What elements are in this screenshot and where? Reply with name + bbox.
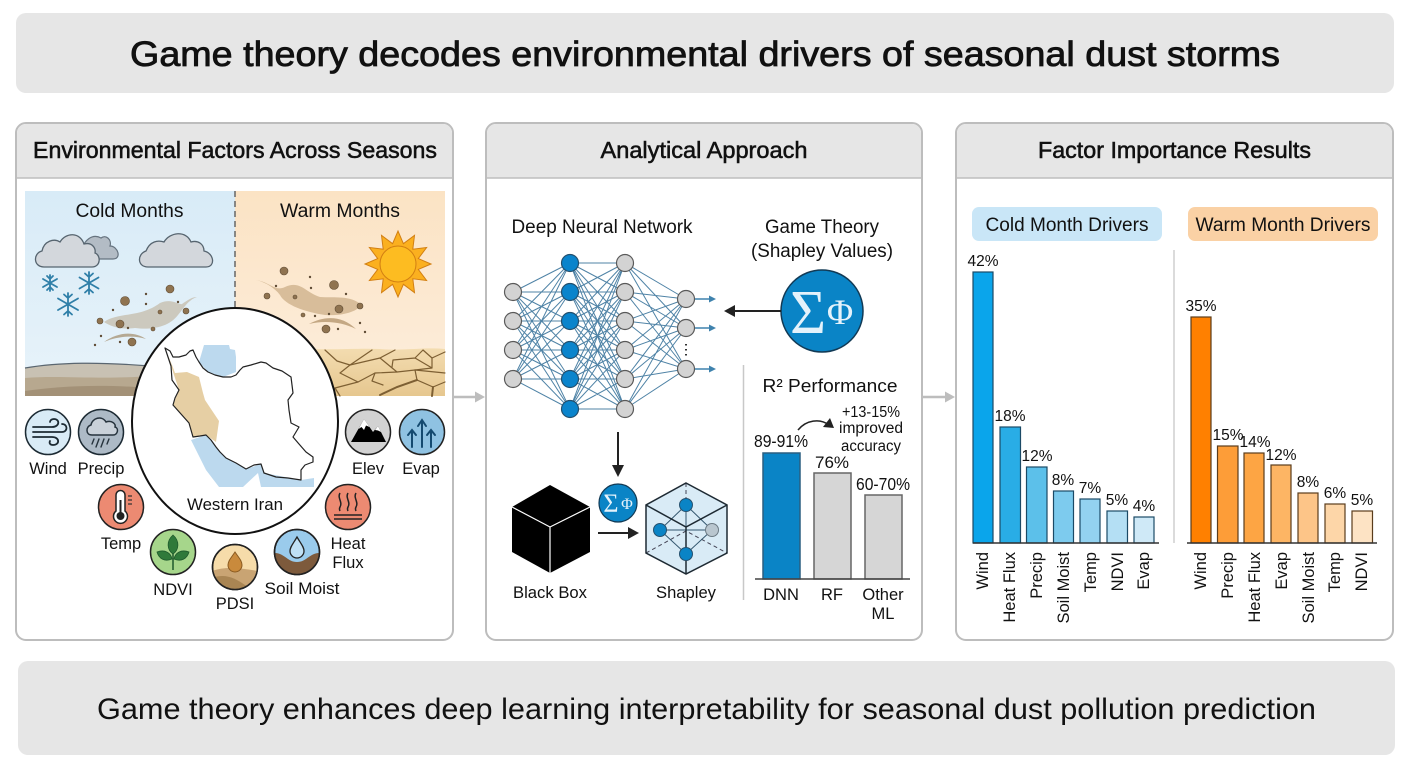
footer banner bbox=[18, 661, 1395, 755]
bar chart: warm month drivers: NDVI bbox=[1353, 552, 1371, 591]
heading: game theory: (Shapley Values) bbox=[751, 241, 893, 262]
arrow: factors to approach bbox=[453, 392, 485, 402]
bar chart: cold month drivers: 5% bbox=[1106, 492, 1128, 509]
icon: small sigma phi badge: Σ bbox=[603, 489, 619, 518]
bar chart: cold month drivers: Heat Flux bbox=[1001, 551, 1019, 623]
panel header: factor importance bbox=[957, 124, 1392, 178]
bar chart: warm month drivers: 5% bbox=[1351, 492, 1373, 509]
divider bbox=[1173, 250, 1175, 543]
bar chart: warm month drivers: 6% bbox=[1324, 485, 1346, 502]
warm months scene: Warm Months bbox=[280, 201, 400, 222]
icon: precipitation bbox=[78, 410, 124, 454]
bar chart: R2 performance bbox=[754, 431, 910, 623]
label: temperature: Temp bbox=[101, 535, 141, 553]
cold months scene bbox=[25, 191, 235, 396]
label: heat flux: Flux bbox=[332, 554, 364, 572]
pill: warm month drivers bbox=[1188, 207, 1378, 241]
bar chart: cold month drivers: 42% bbox=[967, 253, 999, 270]
bar chart: warm month drivers: Heat Flux bbox=[1246, 551, 1264, 623]
bar chart: cold month drivers: Precip bbox=[1028, 552, 1046, 599]
arrow: network to black box stage bbox=[612, 432, 624, 477]
bar chart: R2 performance: ML bbox=[872, 605, 894, 623]
heading: game theory: Game Theory bbox=[765, 217, 879, 238]
icon: small sigma phi badge: Φ bbox=[621, 496, 633, 513]
callout: improved accuracy bbox=[798, 404, 903, 455]
icon: wind bbox=[26, 410, 70, 454]
bar chart: warm month drivers: 35% bbox=[1185, 298, 1217, 315]
bar chart: cold month drivers: Evap bbox=[1135, 552, 1153, 590]
icon: sigma phi badge bbox=[781, 270, 863, 352]
bar chart: R2 performance: 60-70% bbox=[856, 474, 910, 494]
label: shapley: Shapley bbox=[656, 584, 717, 602]
bar chart: cold month drivers: 8% bbox=[1052, 472, 1074, 489]
bar chart: warm month drivers: Precip bbox=[1219, 552, 1237, 599]
panel header: factor importance: Factor Importance Results bbox=[1038, 137, 1311, 163]
bar chart: warm month drivers: Soil Moist bbox=[1300, 552, 1318, 624]
bar chart: R2 performance: RF bbox=[821, 586, 843, 604]
bar chart: R2 performance: 89-91% bbox=[754, 431, 808, 451]
bar chart: warm month drivers: 14% bbox=[1239, 434, 1271, 451]
title banner bbox=[16, 13, 1394, 93]
divider bbox=[742, 365, 744, 600]
icon: elevation bbox=[346, 410, 390, 454]
Caspian Sea bbox=[199, 345, 236, 377]
bar chart: cold month drivers: Wind bbox=[974, 552, 992, 590]
icon: sigma phi badge: Σ bbox=[790, 279, 826, 347]
bar chart: cold month drivers: Temp bbox=[1082, 552, 1100, 592]
panel: factor importance results bbox=[956, 123, 1393, 640]
bar chart: warm month drivers: 8% bbox=[1297, 474, 1319, 491]
bar chart: cold month drivers: 18% bbox=[994, 408, 1026, 425]
panel: analytical approach bbox=[486, 123, 922, 640]
bar chart: R2 performance: DNN bbox=[763, 586, 799, 604]
callout: improved accuracy: accuracy bbox=[841, 438, 901, 455]
callout: improved accuracy: +13-15% bbox=[842, 404, 900, 421]
arrow: black box to shapley bbox=[598, 527, 639, 539]
bar chart: warm month drivers: Temp bbox=[1326, 552, 1344, 592]
Iran outline bbox=[165, 348, 313, 480]
icon: heat flux bbox=[326, 484, 370, 530]
icon: sigma phi badge: Φ bbox=[827, 292, 853, 332]
bar chart: R2 performance: Other bbox=[862, 586, 904, 604]
label: black box: Black Box bbox=[513, 584, 588, 602]
label: PDSI: PDSI bbox=[216, 595, 254, 613]
bar chart: cold month drivers: NDVI bbox=[1109, 552, 1127, 591]
western region highlight bbox=[165, 348, 219, 442]
bar chart: warm month drivers: 12% bbox=[1265, 447, 1297, 464]
label: wind: Wind bbox=[29, 460, 67, 478]
heading: deep neural network: Deep Neural Network bbox=[512, 217, 693, 238]
arrow: game theory into network bbox=[724, 305, 781, 317]
neural network diagram bbox=[504, 254, 716, 418]
panel header: analytical approach: Analytical Approach bbox=[600, 137, 808, 163]
title banner: Game theory decodes environmental drivers of seasonal dust storms bbox=[130, 35, 1280, 74]
footer banner: Game theory enhances deep learning interpretability for seasonal dust pollution prediction bbox=[97, 693, 1316, 726]
heading: R2 performance: R² Performance bbox=[762, 375, 898, 396]
icon: temperature bbox=[98, 484, 144, 530]
warm months scene bbox=[235, 191, 445, 396]
bar chart: cold month drivers: Soil Moist bbox=[1055, 552, 1073, 624]
panel header: environmental factors bbox=[17, 124, 452, 178]
bar chart: warm month drivers: 15% bbox=[1212, 427, 1244, 444]
pill: warm month drivers: Warm Month Drivers bbox=[1196, 215, 1370, 236]
bar chart: cold month drivers bbox=[967, 253, 1159, 624]
icon: black box bbox=[512, 485, 590, 573]
panel: environmental factors across seasons bbox=[16, 123, 453, 640]
bar chart: cold month drivers: 12% bbox=[1021, 448, 1053, 465]
pill: cold month drivers bbox=[972, 207, 1162, 241]
label: NDVI: NDVI bbox=[153, 581, 193, 599]
label: heat flux bbox=[331, 535, 366, 572]
label: soil moisture: Soil Moist bbox=[264, 580, 340, 598]
bar chart: warm month drivers: Wind bbox=[1192, 552, 1210, 590]
icon: soil moisture bbox=[274, 530, 320, 575]
icon: sun bbox=[365, 231, 431, 297]
bar chart: cold month drivers: 4% bbox=[1133, 498, 1155, 515]
icon: NDVI bbox=[150, 530, 196, 574]
map circle: western Iran: Western Iran bbox=[187, 496, 283, 514]
label: heat flux: Heat bbox=[331, 535, 366, 553]
icon: PDSI bbox=[212, 544, 258, 590]
label: evaporation: Evap bbox=[402, 460, 440, 478]
icon: evaporation bbox=[400, 410, 444, 454]
panel header: environmental factors: Environmental Factors Across Seasons bbox=[33, 137, 437, 163]
icon: shapley glass cube bbox=[646, 483, 727, 574]
bar chart: R2 performance: 76% bbox=[815, 453, 849, 472]
bar chart: warm month drivers: Evap bbox=[1273, 552, 1291, 590]
bar chart: cold month drivers: 7% bbox=[1079, 480, 1101, 497]
pill: cold month drivers: Cold Month Drivers bbox=[986, 215, 1148, 236]
Persian Gulf bbox=[191, 435, 314, 487]
label: precipitation: Precip bbox=[78, 460, 124, 478]
cold months scene: Cold Months bbox=[76, 201, 184, 222]
arrow: approach to results bbox=[922, 392, 955, 402]
panel header: analytical approach bbox=[487, 124, 921, 178]
map circle: western Iran bbox=[132, 308, 338, 534]
heading: game theory bbox=[751, 217, 893, 262]
label: elevation: Elev bbox=[352, 460, 385, 478]
cracked earth bbox=[305, 348, 445, 396]
icon: small sigma phi badge bbox=[599, 484, 637, 522]
bar chart: warm month drivers bbox=[1185, 298, 1377, 624]
callout: improved accuracy: improved bbox=[839, 420, 903, 437]
